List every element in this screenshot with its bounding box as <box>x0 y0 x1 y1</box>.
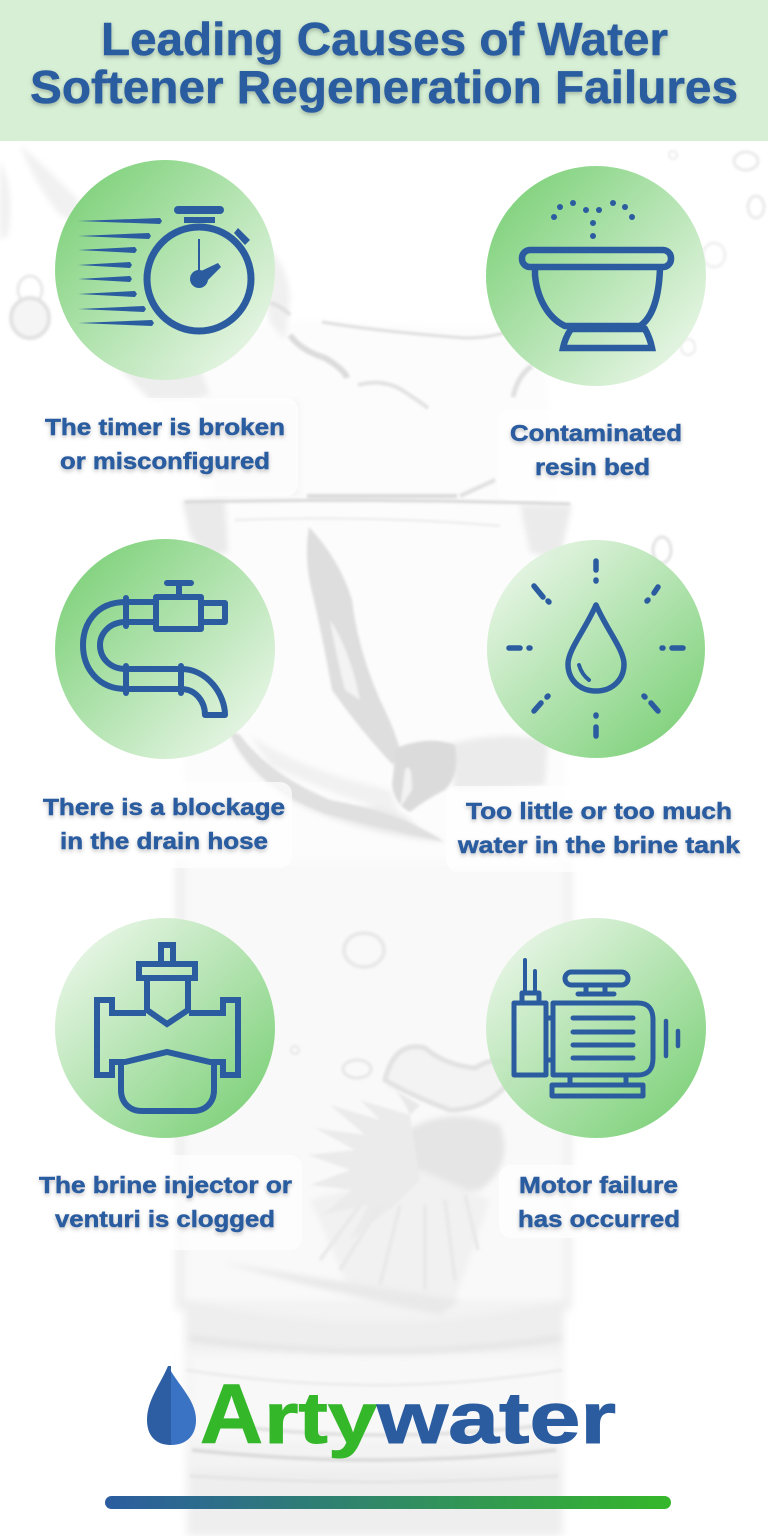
gradient bar <box>105 1496 671 1509</box>
label: timer: The timer is broken <box>45 414 285 440</box>
title: Leading Causes of Water <box>101 13 668 65</box>
label: drain hose <box>30 782 292 868</box>
circle: drain hose <box>55 539 275 759</box>
label: drain hose: There is a blockage <box>43 794 285 820</box>
icon: stopwatch <box>78 206 251 331</box>
title: Softener Regeneration Failures <box>30 61 738 113</box>
label: timer: or misconfigured <box>60 448 270 474</box>
label: motor: Motor failure <box>519 1172 678 1198</box>
label: resin: Contaminated <box>510 420 682 446</box>
label: motor <box>499 1165 699 1238</box>
label: injector: venturi is clogged <box>55 1206 275 1232</box>
burst spikes <box>308 1100 420 1240</box>
icon: venturi valve <box>97 945 238 1111</box>
label: injector <box>26 1155 302 1250</box>
arc <box>228 730 444 842</box>
panel: motor <box>486 918 706 1238</box>
label: resin: resin bed <box>535 454 650 480</box>
logo: Artywater <box>147 1366 616 1461</box>
label: brine water <box>446 786 752 872</box>
icon: electric motor <box>514 960 678 1096</box>
panel: drain hose <box>30 539 292 868</box>
label: motor: has occurred <box>518 1206 680 1232</box>
panel: timer <box>30 160 298 496</box>
ice edge and glass base lines <box>192 1450 556 1460</box>
circle: resin <box>486 166 706 386</box>
circle: brine water <box>487 540 705 758</box>
swirl column <box>307 527 400 765</box>
circle: injector <box>55 918 275 1138</box>
circle: timer <box>55 160 275 380</box>
title <box>30 13 738 113</box>
label: drain hose: in the drain hose <box>60 828 268 854</box>
patches around rim <box>182 500 228 554</box>
rim <box>185 500 570 504</box>
label: brine water: Too little or too much <box>466 798 732 824</box>
logo: Artywater: rty <box>264 1379 377 1459</box>
panel: brine water <box>446 540 752 872</box>
logo: Artywater: water <box>376 1379 616 1459</box>
logo: Artywater: A <box>200 1367 263 1461</box>
icon: bowl fountain <box>522 200 671 348</box>
label: injector: The brine injector or <box>39 1172 292 1198</box>
icon: logo drop <box>147 1366 196 1445</box>
panel: injector <box>26 918 302 1250</box>
header band <box>0 0 768 141</box>
droplet outlines <box>343 1060 371 1078</box>
icon: pipe <box>83 583 225 715</box>
icon: water drop with rays <box>509 561 683 736</box>
circle: motor <box>486 918 706 1138</box>
label: timer <box>30 398 298 496</box>
label: resin <box>498 410 690 500</box>
swirl cluster <box>392 741 456 812</box>
label: brine water: water in the brine tank <box>457 832 740 858</box>
panel: resin <box>486 166 706 500</box>
splash lines <box>322 322 510 338</box>
